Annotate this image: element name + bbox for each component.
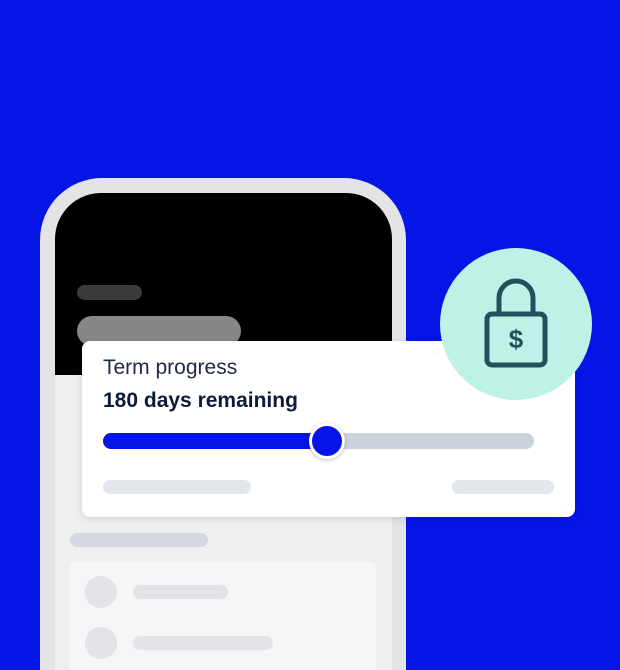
list panel [70, 562, 376, 670]
footer placeholders [103, 480, 251, 494]
card: term progress [82, 341, 575, 517]
header bar small [77, 285, 142, 300]
list item 2 [85, 627, 273, 659]
progress track [103, 433, 534, 449]
icon: lock with dollar [440, 248, 592, 400]
header bar large [77, 316, 241, 346]
knob [309, 423, 345, 459]
section heading placeholder [70, 533, 208, 547]
phone screen [55, 193, 392, 670]
icon: lock with dollar: $ [509, 324, 524, 354]
list item 1 [85, 576, 228, 608]
value: 180 days remaining [103, 389, 298, 412]
screen header [55, 193, 392, 375]
phone [40, 178, 406, 670]
label: Term progress [103, 356, 237, 379]
